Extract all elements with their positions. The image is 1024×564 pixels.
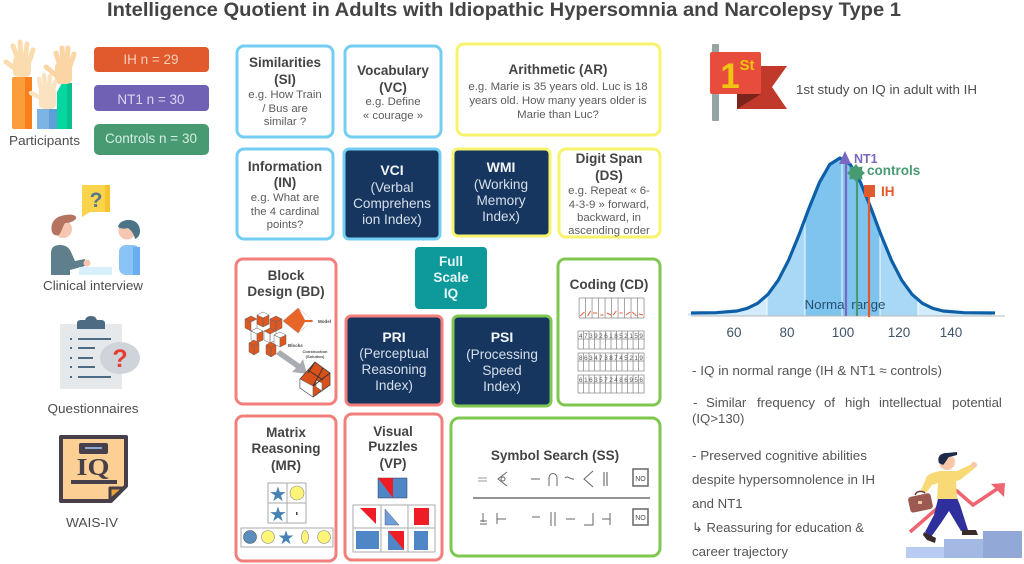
coding key illustration: 4 7 3 9 2 6 1 8 5 2 1 5 9 — [579, 333, 644, 340]
card: symbol search: NO — [635, 515, 646, 522]
text: finding two: - — [693, 395, 697, 410]
index: PSI: PSI — [491, 329, 513, 345]
chart: IQ bell curve — [688, 150, 1005, 340]
icon: clinical interview: ? — [90, 189, 102, 212]
label: questionnaires: Questionnaires — [48, 402, 138, 416]
index: WMI: Memory — [476, 193, 526, 208]
card: information: Information — [248, 159, 322, 174]
IH group badge — [94, 47, 209, 72]
label: participants: Participants — [9, 134, 80, 148]
index: PRI: Index) — [375, 378, 413, 393]
marker: NT1: NT1 — [854, 152, 878, 166]
IH group badge: IH n = 29 — [123, 52, 179, 67]
text: finding two: intellectual — [879, 395, 941, 410]
marker: NT1 — [839, 151, 878, 316]
index: PSI: (Processing — [466, 347, 538, 362]
card: matrix reasoning — [236, 416, 336, 561]
card: digit span: 4-3-9 » forward, — [569, 199, 649, 211]
index: VCI: VCI — [380, 162, 404, 178]
card: visual puzzles: Visual — [373, 424, 413, 439]
index: WMI: WMI — [487, 159, 515, 175]
marker: IH: IH — [881, 184, 894, 199]
text: finding two: potential — [952, 395, 1002, 410]
marker: controls — [847, 163, 920, 316]
icon: first place flag — [710, 44, 787, 121]
text: finding three: - Preserved cognitive abilities — [692, 448, 867, 463]
icon: first place flag: St — [740, 57, 755, 74]
card: digit span: e.g. Repeat « 6- — [568, 185, 650, 197]
label: clinical interview: Clinical interview — [43, 279, 144, 293]
index: PSI: Index) — [483, 379, 521, 394]
card: digit span: backward, in — [577, 212, 641, 224]
card: block design — [236, 259, 336, 404]
card: information — [237, 149, 333, 239]
chart axis labels: 80 — [779, 325, 795, 340]
visual puzzle illustration — [353, 478, 435, 552]
card: vocabulary: (VC) — [379, 80, 407, 95]
text: finding three — [692, 448, 875, 559]
index: WMI — [453, 149, 550, 236]
icon: clinical interview — [51, 185, 140, 275]
chart axis labels: 120 — [888, 325, 910, 340]
card: digit span: Digit Span — [576, 151, 642, 166]
card: arithmetic: years old. How many years older is — [469, 95, 647, 107]
panel: subtest grid — [236, 44, 660, 561]
card: arithmetic: Marie than Luc? — [517, 109, 599, 121]
chart axis labels — [726, 325, 962, 340]
coding key illustration: 8 6 3 4 7 3 8 7 4 5 2 1 9 — [579, 355, 644, 362]
card: similarities — [237, 46, 333, 137]
text: finding two: of — [824, 395, 835, 410]
text: finding one: - IQ in normal range (IH & NT1 ≈ controls) — [692, 363, 942, 378]
text: finding two: high — [845, 395, 870, 410]
card: coding: Coding (CD) — [570, 277, 648, 292]
matrix puzzle illustration: ★ — [269, 504, 287, 526]
full scale IQ: Scale — [433, 270, 469, 285]
panel: key findings — [688, 44, 1022, 559]
chart axis labels: 140 — [940, 325, 962, 340]
index: VCI: Comprehens — [353, 196, 431, 211]
card: arithmetic: e.g. Marie is 35 years old. Luc is 18 — [468, 81, 648, 93]
card: symbol search: Symbol Search (SS) — [491, 448, 619, 463]
index: PRI — [346, 316, 442, 405]
card: digit span: ascending order — [568, 225, 650, 237]
text: finding three: career trajectory — [692, 544, 788, 559]
card: block design: (Solution) — [306, 354, 325, 359]
controls group badge — [94, 124, 209, 155]
text: finding three: despite hypersomnolence in IH — [692, 472, 875, 487]
icon: person climbing steps — [906, 452, 1022, 558]
card: similarities: similar ? — [264, 116, 306, 128]
card: vocabulary: Vocabulary — [357, 63, 429, 78]
panel: methods — [6, 42, 209, 530]
card: block design: Construction — [303, 349, 328, 354]
text: finding two: Similar — [706, 395, 747, 410]
index: PRI: PRI — [382, 329, 406, 345]
index: VCI: ion Index) — [362, 212, 422, 227]
card: arithmetic: Arithmetic (AR) — [508, 62, 608, 77]
chart axis labels: 60 — [726, 325, 742, 340]
coding key illustration: 6 1 6 3 5 7 2 4 8 6 9 5 6 — [579, 377, 644, 384]
card: similarities: / Bus are — [262, 103, 308, 115]
full scale IQ: Full — [439, 254, 463, 269]
card: information: points? — [267, 219, 303, 231]
card: vocabulary: « courage » — [363, 110, 423, 122]
card: visual puzzles: Puzzles — [368, 439, 418, 454]
card: digit span: (DS) — [595, 168, 623, 183]
icon: raised hands — [6, 42, 74, 129]
card: information: the 4 cardinal — [251, 206, 319, 218]
text: finding three: ↳ Reassuring for education & — [692, 520, 864, 535]
card: block design: Block — [268, 268, 305, 283]
card: similarities: (SI) — [274, 72, 296, 87]
NT1 group badge: NT1 n = 30 — [117, 92, 185, 107]
card: vocabulary: e.g. Define — [365, 96, 421, 108]
card: matrix reasoning: (MR) — [271, 458, 301, 473]
card: matrix reasoning: Reasoning — [251, 441, 321, 456]
NT1 group badge — [94, 85, 209, 111]
index: PRI: (Perceptual — [359, 346, 429, 361]
card: symbol search — [451, 418, 660, 556]
full scale IQ — [415, 247, 487, 309]
card: visual puzzles — [345, 414, 442, 560]
label: WAIS-IV: WAIS-IV — [66, 516, 119, 530]
text: finding three: and NT1 — [692, 496, 743, 511]
text: finding two: (IQ>130) — [692, 411, 744, 426]
coding key illustration — [578, 298, 644, 393]
icon: IQ document — [61, 437, 126, 501]
index: VCI — [344, 149, 440, 239]
index: WMI: (Working — [474, 177, 528, 192]
chart axis labels: 100 — [832, 325, 854, 340]
card: matrix reasoning: Matrix — [266, 425, 306, 440]
card: digit span — [559, 149, 660, 237]
chart label: normal range: Normal range — [804, 297, 886, 312]
text: finding two: frequency — [757, 395, 815, 410]
card: similarities: Similarities — [249, 55, 321, 70]
card: block design: Design (BD) — [247, 284, 325, 299]
card: block design: Blocks — [288, 343, 303, 348]
marker: controls: controls — [867, 163, 920, 178]
index: PSI — [453, 316, 551, 406]
controls group badge: Controls n = 30 — [105, 131, 197, 146]
card: information: e.g. What are — [251, 192, 319, 204]
card: coding — [558, 259, 660, 405]
matrix puzzle illustration — [241, 483, 333, 549]
block design illustration — [245, 312, 286, 357]
matrix puzzle illustration: ★ — [269, 484, 287, 506]
text: first study: 1st study on IQ in adult with IH — [796, 83, 977, 97]
index: PSI: Speed — [482, 363, 522, 378]
index: PRI: Reasoning — [362, 362, 426, 377]
card: arithmetic — [457, 44, 660, 135]
icon: questionnaire clipboard: ? — [112, 345, 128, 373]
icon: first place flag: 1 — [720, 57, 740, 96]
matrix puzzle illustration: ★ — [277, 528, 295, 549]
icon: questionnaire clipboard — [60, 316, 140, 389]
symbol search illustration — [473, 469, 650, 526]
icon: IQ document: IQ — [76, 455, 110, 481]
text: finding two — [692, 395, 1002, 426]
card: information: (IN) — [274, 175, 296, 190]
card: similarities: e.g. How Train — [248, 89, 322, 101]
card: visual puzzles: (VP) — [380, 456, 406, 471]
card: symbol search: NO — [635, 476, 646, 483]
index: WMI: Index) — [482, 209, 520, 224]
full scale IQ: IQ — [444, 286, 458, 301]
card: vocabulary — [345, 46, 441, 137]
index: VCI: (Verbal — [370, 180, 414, 195]
card: block design: Model — [318, 319, 331, 324]
marker: IH — [864, 184, 894, 317]
